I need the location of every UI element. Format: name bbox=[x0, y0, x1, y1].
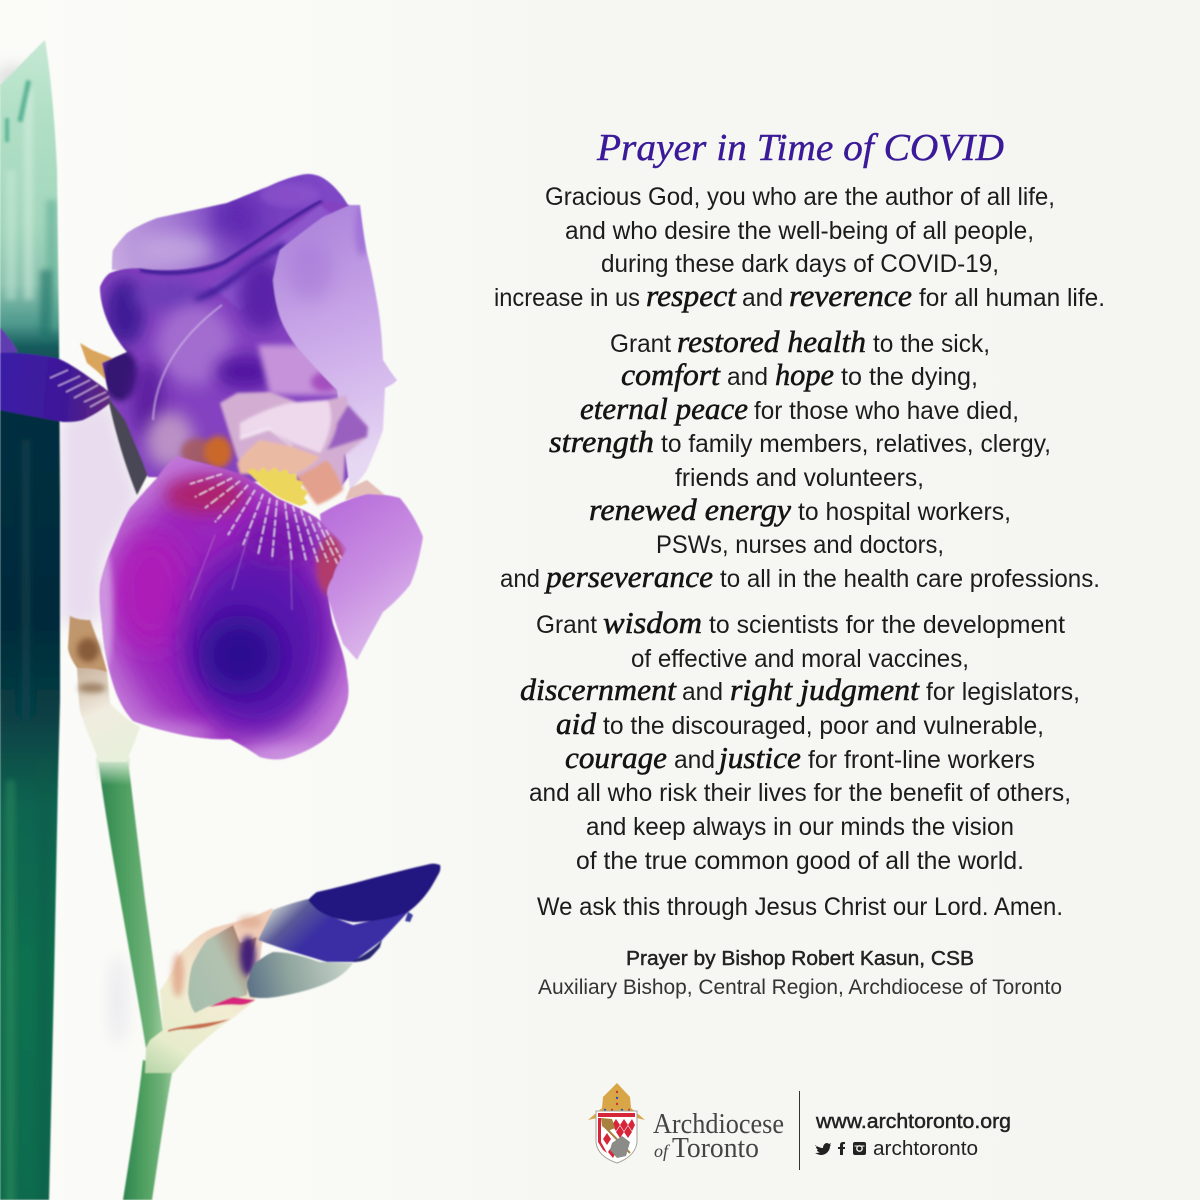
prayer stanza 3: for legislators, bbox=[926, 678, 1080, 706]
prayer stanza 2: and bbox=[500, 565, 540, 593]
prayer stanza 2: to the sick, bbox=[873, 330, 990, 358]
central violet standard petal bbox=[100, 200, 368, 486]
prayer stanza 3: for front-line workers bbox=[808, 746, 1035, 774]
right light lilac petal bbox=[273, 204, 397, 490]
prayer stanza 2: to hospital workers, bbox=[798, 498, 1011, 526]
prayer stanza 3: and bbox=[682, 678, 723, 706]
flower stem bbox=[96, 758, 173, 1200]
logo wordmark: Toronto bbox=[672, 1133, 759, 1164]
website: www.archtoronto.org bbox=[815, 1111, 1011, 1133]
prayer stanza 1: Gracious God, you who are the author of all life, bbox=[545, 183, 1055, 211]
prayer stanza 1: during these dark days of COVID-19, bbox=[601, 250, 999, 278]
prayer stanza 3 bbox=[520, 605, 1080, 875]
prayer stanza 2: to family members, relatives, clergy, bbox=[661, 430, 1051, 458]
prayer stanza 3: justice bbox=[715, 740, 801, 775]
prayer stanza 2: comfort bbox=[621, 357, 721, 392]
prayer stanza 2: to the dying, bbox=[841, 363, 978, 391]
closing line: We ask this through Jesus Christ our Lord. Amen. bbox=[537, 893, 1063, 921]
left dark petal over the leaf bbox=[0, 327, 118, 422]
prayer stanza 3: wisdom bbox=[603, 605, 702, 640]
logo wordmark bbox=[653, 1109, 784, 1164]
title: Prayer in Time of COVID bbox=[596, 127, 1004, 169]
prayer stanza 1: for all human life. bbox=[919, 284, 1105, 312]
prayer stanza 3: and keep always in our minds the vision bbox=[586, 813, 1014, 841]
prayer stanza 2: PSWs, nurses and doctors, bbox=[656, 531, 944, 559]
logo: coat of arms bbox=[588, 1083, 645, 1163]
photo: iris plant bbox=[0, 40, 440, 1200]
prayer stanza 1: and bbox=[742, 284, 783, 312]
prayer stanza 3: Grant bbox=[536, 611, 597, 639]
prayer stanza 3: and bbox=[674, 746, 715, 774]
pale pink centre of the flower bbox=[220, 392, 368, 505]
prayer stanza 2: hope bbox=[775, 357, 834, 392]
yellow beard bbox=[247, 467, 308, 506]
prayer stanza 2: restored health bbox=[677, 324, 866, 359]
footer divider bbox=[799, 1091, 800, 1170]
prayer stanza 3: to the discouraged, poor and vulnerable, bbox=[603, 712, 1044, 740]
prayer stanza 3: of the true common good of all the world. bbox=[576, 847, 1024, 875]
prayer stanza 2: eternal peace bbox=[580, 391, 748, 426]
prayer stanza 2: renewed energy bbox=[589, 492, 791, 527]
prayer stanza 2: and bbox=[727, 363, 768, 391]
prayer stanza 2: strength bbox=[549, 424, 654, 459]
prayer stanza 3: and all who risk their lives for the benefit of others, bbox=[529, 779, 1071, 807]
logo wordmark: Archdiocese bbox=[653, 1109, 784, 1140]
stem sheath beneath flower bbox=[108, 395, 150, 495]
attribution: Auxiliary Bishop, Central Region, Archdiocese of Toronto bbox=[538, 976, 1062, 999]
prayer stanza 2: to all in the health care professions. bbox=[720, 565, 1100, 593]
prayer stanza 3: discernment bbox=[520, 672, 677, 707]
prayer stanza 1: increase in us bbox=[494, 284, 640, 312]
prayer stanza 3: of effective and moral vaccines, bbox=[631, 645, 969, 673]
right lower lilac fall petal bbox=[320, 480, 423, 660]
icon: facebook bbox=[838, 1142, 845, 1155]
large violet fall petal bbox=[97, 456, 350, 768]
small lower bud beside the flower bbox=[68, 616, 140, 762]
logo wordmark: of bbox=[654, 1141, 671, 1161]
prayer stanza 2: perseverance bbox=[544, 559, 713, 594]
attribution bbox=[538, 947, 1062, 999]
prayer stanza 3: aid bbox=[556, 706, 596, 741]
soft flower shadow bbox=[0, 66, 140, 1045]
attribution: Prayer by Bishop Robert Kasun, CSB bbox=[626, 947, 974, 970]
prayer stanza 2: friends and volunteers, bbox=[675, 464, 924, 492]
prayer stanza 2: for those who have died, bbox=[754, 397, 1019, 425]
prayer stanza 2: Grant bbox=[610, 330, 671, 358]
prayer stanza 3: right judgment bbox=[730, 672, 920, 707]
social handle: archtoronto bbox=[873, 1138, 978, 1160]
icon: twitter bbox=[815, 1143, 831, 1155]
prayer stanza 3: courage bbox=[565, 740, 667, 775]
prayer stanza 1 bbox=[494, 183, 1105, 313]
lower iris bud bbox=[145, 864, 440, 1073]
green iris leaf bbox=[0, 40, 60, 1200]
prayer stanza 1: reverence bbox=[789, 278, 912, 313]
prayer stanza 1: respect bbox=[646, 278, 737, 313]
prayer stanza 3: to scientists for the development bbox=[709, 611, 1065, 639]
upper standard petal bbox=[112, 174, 348, 274]
prayer stanza 1: and who desire the well-being of all people, bbox=[565, 217, 1034, 245]
icon: instagram bbox=[853, 1142, 866, 1155]
prayer stanza 2 bbox=[500, 324, 1100, 594]
